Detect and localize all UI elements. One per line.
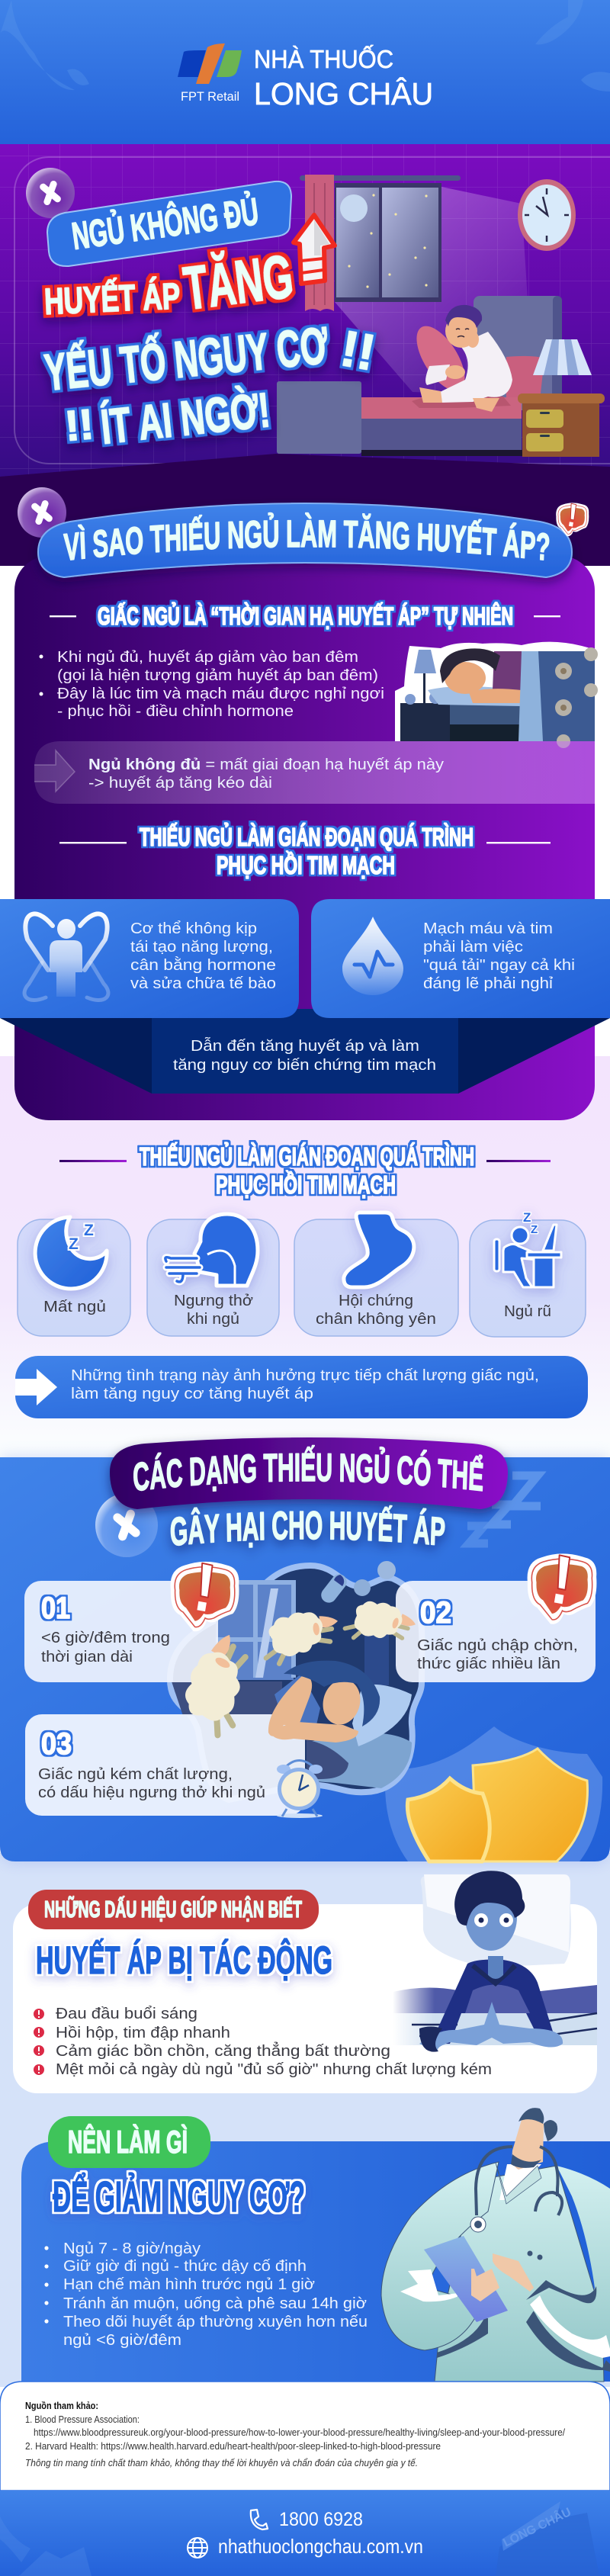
list: recommendations: Giữ giờ đi ngủ - thức dậy cố định — [63, 2258, 307, 2275]
hero heading: ít ai ngờ: ÍT AI NGỜ! — [98, 382, 272, 454]
panel: sleep disorders — [15, 1142, 588, 1418]
card: vessels and heart overloaded: "quá tải" ngay cả khi — [423, 957, 575, 974]
card: vessels and heart overloaded: đáng lẽ phải nghỉ — [423, 975, 554, 992]
callout: lost blood pressure dip: -> huyết áp tăng kéo dài — [88, 775, 272, 792]
callout: direct impact on sleep quality: Những tình trạng này ảnh hưởng trực tiếp chất lượng giấc ngủ, — [71, 1367, 539, 1384]
card: body cannot recover — [0, 899, 299, 1018]
card: fragmented sleep: Giấc ngủ chập chờn, — [417, 1637, 578, 1654]
red pill heading: signs to recognize: NHỮNG DẤU HIỆU GIÚP NHẬN BIẾT — [44, 1895, 302, 1922]
list: recommendations: Tránh ăn muộn, uống cà phê sau 14h giờ — [63, 2295, 367, 2312]
icon: blood drop with pulse — [342, 917, 403, 995]
icon: FPT logo — [178, 43, 242, 84]
panel: types of sleep deprivation — [0, 1434, 610, 1867]
icon: person asleep at desk — [494, 1210, 561, 1287]
list: symptoms: Cảm giác bồn chồn, căng thẳng bất thường — [56, 2041, 390, 2060]
contact: website: nhathuoclongchau.com.vn — [218, 2535, 423, 2558]
card: under six hours — [24, 1581, 218, 1682]
heading: interrupts cardiovascular recovery, light version — [59, 1142, 551, 1199]
card: body cannot recover: tái tạo năng lượng, — [130, 939, 273, 956]
panel: references: 2. Harvard Health: https://www.health.harvard.edu/heart-health/poor-sleep-linked-to-high-blood-pressure — [25, 2441, 441, 2452]
hero heading: ít ai ngờ — [63, 382, 272, 454]
card: sleep apnea — [147, 1214, 279, 1336]
icon: moon and z: Z — [84, 1222, 94, 1239]
card: poor quality sleep: 03 — [41, 1727, 72, 1761]
icon: head and breath — [165, 1214, 258, 1286]
card: under six hours: 01 — [41, 1592, 70, 1625]
icon: moon and z: Z — [69, 1235, 79, 1253]
illustration: table lamp and night stand — [518, 339, 605, 457]
callout: lost blood pressure dip: Ngủ không đủ = mất giai đoạn hạ huyết áp này — [88, 756, 444, 773]
card: sleep apnea: Ngưng thở — [174, 1293, 253, 1309]
illustration: doctor — [381, 2108, 610, 2382]
card: under six hours: <6 giờ/đêm trong — [41, 1630, 170, 1646]
heading: interrupts cardiovascular recovery — [59, 823, 551, 879]
hero heading: yếu tố nguy cơ — [42, 316, 380, 402]
card: poor quality sleep: có dấu hiệu ngưng thở khi ngủ — [38, 1784, 265, 1801]
icon: white arrow — [15, 1369, 57, 1405]
icon: x bubble — [26, 168, 75, 218]
hero heading: yếu tố nguy cơ: !! — [337, 320, 380, 381]
icon: alert right — [528, 1553, 596, 1624]
card: poor quality sleep: Giấc ngủ kém chất lượng, — [38, 1766, 233, 1783]
callout: direct impact on sleep quality — [15, 1356, 588, 1418]
heading: reduce the risk: ĐỂ GIẢM NGUY CƠ? — [53, 2172, 305, 2221]
text block: sleep bullets: Đây là lúc tim và mạch máu được nghỉ ngơi — [57, 686, 384, 702]
logo text: Nhà Thuốc: NHÀ THUỐC — [254, 44, 393, 73]
subtitle: harm blood pressure: GÂY HẠI CHO HUYẾT ÁP — [165, 1505, 450, 1556]
ribbon: leads to hypertension: tăng nguy cơ biến chứng tim mạch — [173, 1057, 436, 1074]
icon: pills — [318, 1561, 396, 1606]
illustration: store watermark: LONG CHÂU — [500, 2504, 573, 2550]
panel: what to do — [21, 2108, 610, 2382]
card: vessels and heart overloaded — [311, 899, 610, 1018]
card: fragmented sleep: thức giấc nhiều lần — [417, 1656, 560, 1672]
panel: references: Thông tin mang tính chất tham khảo, không thay thế lời khuyên và chẩn đoán của chuyên gia y tế. — [25, 2458, 418, 2468]
card: restless legs: chân không yên — [316, 1311, 436, 1328]
illustration: wall clock — [518, 179, 576, 251]
illustration: window blob behind the sleepless woman — [170, 1566, 422, 1800]
card: under six hours: thời gian dài — [41, 1649, 133, 1665]
icon: moon and z — [35, 1217, 107, 1289]
card: body cannot recover: Cơ thể không kịp — [130, 920, 257, 937]
illustration: man awake in bed — [393, 1871, 597, 2052]
icon: foot — [344, 1213, 414, 1287]
hero panel — [0, 144, 610, 566]
hero heading: ít ai ngờ: !! — [63, 400, 95, 450]
text block: sleep bullets: Khi ngủ đủ, huyết áp giảm vào ban đêm — [57, 649, 358, 666]
panel: why lack of sleep raises blood pressure — [0, 487, 610, 1120]
list: recommendations: Hạn chế màn hình trước ngủ 1 giờ — [63, 2276, 315, 2293]
icon: x bubble — [18, 487, 66, 538]
card: narcolepsy: Ngủ rũ — [504, 1303, 551, 1320]
icon: outline arrow — [34, 750, 75, 792]
callout: direct impact on sleep quality: làm tăng nguy cơ tăng huyết áp — [71, 1386, 313, 1402]
card: fragmented sleep — [396, 1581, 596, 1682]
hero heading: yếu tố nguy cơ: YẾU TỐ NGUY CƠ — [42, 316, 331, 402]
hero tag: Ngủ không đủ — [47, 181, 291, 266]
panel: references: 1. Blood Pressure Association: — [25, 2414, 140, 2425]
list: symptoms: Mệt mỏi cả ngày dù ngủ "đủ số giờ" nhưng chất lượng kém — [56, 2061, 492, 2078]
illustration: woman, pillow and sheep — [172, 1594, 419, 1788]
logo text: FPT Retail: FPT Retail — [181, 89, 239, 104]
illustration: bed and man — [277, 296, 562, 456]
card: restless legs: Hội chứng — [339, 1293, 413, 1309]
section title banner — [35, 503, 578, 588]
panel: signs of impact — [13, 1871, 597, 2093]
list: recommendations: ngủ <6 giờ/đêm — [63, 2332, 181, 2349]
hero heading: huyết áp tăng: TĂNG — [180, 242, 297, 323]
red pill heading: signs to recognize — [28, 1890, 319, 1929]
card: vessels and heart overloaded: phải làm việc — [423, 939, 523, 956]
list: symptoms: Đau đầu buổi sáng — [56, 2006, 197, 2022]
title banner: forms of lack of sleep: CÁC DẠNG THIẾU NGỦ CÓ THỂ — [133, 1444, 483, 1492]
list: recommendations: Ngủ 7 - 8 giờ/ngày — [63, 2240, 201, 2257]
heading: interrupts cardiovascular recovery, light version: PHỤC HỒI TIM MẠCH — [216, 1171, 396, 1199]
panel: references: Nguồn tham khảo: — [25, 2400, 98, 2411]
logo text: Long Châu: LONG CHÂU — [254, 76, 433, 111]
card: fragmented sleep: 02 — [420, 1596, 451, 1630]
footer with contacts — [0, 2491, 610, 2576]
icon: globe — [188, 2538, 207, 2558]
icon: phone — [251, 2510, 268, 2529]
heading: interrupts cardiovascular recovery: PHỤC HỒI TIM MẠCH — [217, 851, 395, 879]
ribbon: leads to hypertension: Dẫn đến tăng huyết áp và làm — [191, 1037, 419, 1055]
list: symptoms: Hồi hộp, tim đập nhanh — [56, 2025, 230, 2041]
icon: alert left — [171, 1562, 239, 1631]
list: recommendations — [44, 2240, 368, 2349]
card: vessels and heart overloaded: Mạch máu và tim — [423, 920, 553, 937]
panel: references — [0, 2382, 610, 2491]
card: body cannot recover: và sửa chữa tế bào — [130, 975, 276, 992]
icon: body with energy arrows — [24, 914, 108, 1001]
icon: red up arrow — [294, 215, 335, 284]
illustration: store watermark — [0, 2501, 599, 2576]
header band with logo — [0, 0, 610, 144]
icon: z z z — [467, 1476, 541, 1543]
hero tag: Ngủ không đủ: NGỦ KHÔNG ĐỦ — [69, 189, 261, 258]
green pill heading: what to do — [48, 2116, 210, 2168]
heading: blood pressure affected: HUYẾT ÁP BỊ TÁC ĐỘNG — [36, 1938, 332, 1982]
icon: alarm clock — [277, 1760, 323, 1818]
card: body cannot recover: cân bằng hormone — [130, 956, 276, 974]
icon: x bubble — [95, 1493, 158, 1557]
icon: alert — [556, 503, 589, 536]
list: recommendations: Theo dõi huyết áp thường xuyên hơn nếu — [63, 2314, 368, 2330]
hero heading: huyết áp tăng — [43, 242, 297, 323]
ribbon: leads to hypertension — [0, 1009, 610, 1094]
illustration: shields — [385, 1726, 602, 1861]
text block: sleep bullets — [40, 649, 384, 720]
list: symptoms — [34, 2006, 492, 2078]
illustration: woman lying in bed — [395, 642, 598, 748]
title banner: forms of lack of sleep — [104, 1434, 514, 1521]
card: insomnia: Mất ngủ — [43, 1299, 106, 1315]
card: sleep apnea: khi ngủ — [187, 1311, 239, 1328]
icon: person asleep at desk: Z — [523, 1210, 531, 1225]
icon: person asleep at desk: Z — [531, 1223, 538, 1236]
panel: references: https://www.bloodpressureuk.org/your-blood-pressure/how-to-lower-your-blood-pressure/healthy-living/sleep-and-your-blood-pressure/ — [34, 2427, 565, 2438]
illustration: window, curtain and light — [300, 175, 534, 397]
hero heading: huyết áp tăng: HUYẾT ÁP — [43, 275, 181, 323]
text block: sleep bullets: - phục hồi - điều chỉnh hormone — [57, 703, 294, 720]
green pill heading: what to do: NÊN LÀM GÌ — [68, 2123, 188, 2160]
contact: phone number: 1800 6928 — [279, 2509, 363, 2530]
card: insomnia — [18, 1217, 130, 1336]
text block: sleep bullets: (gọi là hiện tượng giảm huyết áp ban đêm) — [57, 667, 378, 684]
card: narcolepsy — [470, 1210, 586, 1337]
section title banner: VÌ SAO THIẾU NGỦ LÀM TĂNG HUYẾT ÁP? — [63, 512, 549, 560]
card: poor quality sleep — [25, 1714, 305, 1816]
callout: lost blood pressure dip — [34, 741, 595, 804]
card: restless legs — [294, 1213, 458, 1336]
